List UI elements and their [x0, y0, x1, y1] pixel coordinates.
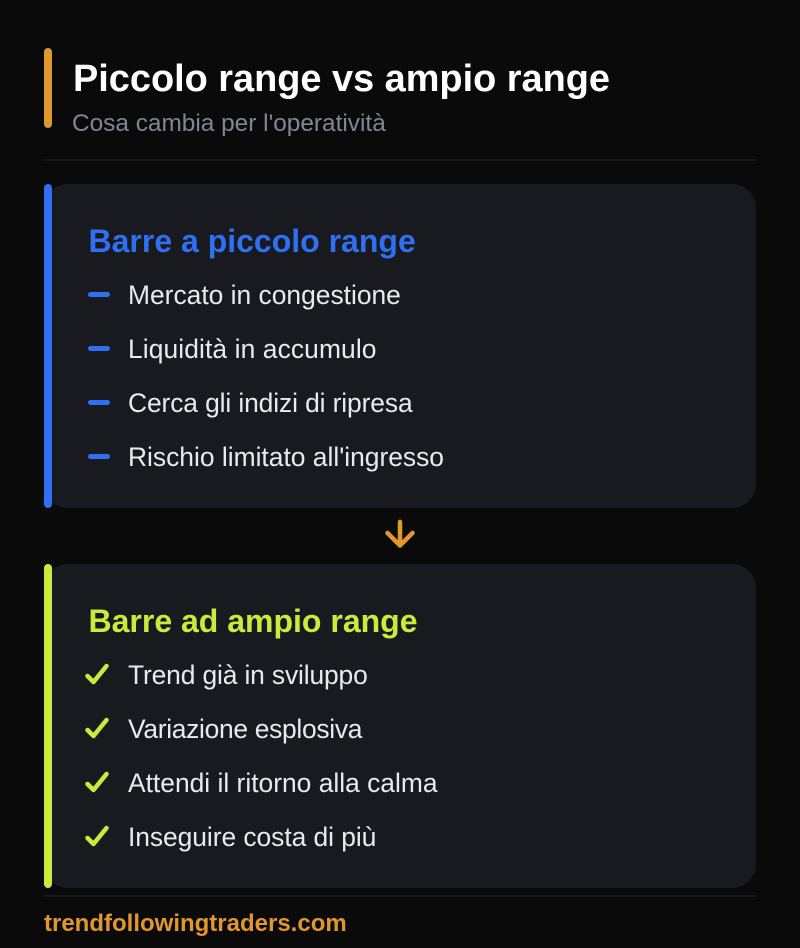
list item: risk: Rischio limitato all'ingresso: [128, 442, 444, 472]
footer: website: trendfollowingtraders.com: [44, 910, 347, 937]
arrow: down: [385, 520, 415, 548]
panel: wide range bars: [44, 564, 756, 888]
list item: chasing: Inseguire costa di più: [128, 822, 376, 852]
panel accent bar: blue: [44, 184, 52, 508]
panel accent bar: lime: [44, 564, 52, 888]
list item: liquidity: Liquidità in accumulo: [128, 334, 377, 364]
panel: small range bars: [44, 184, 756, 508]
title: Piccolo range vs ampio range: [73, 58, 610, 100]
list item: wait: Attendi il ritorno alla calma: [128, 768, 438, 798]
list item: trend: Trend già in sviluppo: [128, 660, 368, 690]
header accent bar: [44, 48, 52, 128]
list item: congestion: Mercato in congestione: [128, 280, 401, 310]
subtitle: Cosa cambia per l'operatività: [72, 110, 386, 137]
list item: recovery: Cerca gli indizi di ripresa: [128, 388, 413, 418]
heading: small range: Barre a piccolo range: [88, 223, 416, 259]
heading: wide range: Barre ad ampio range: [88, 603, 418, 639]
list item: variation: Variazione esplosiva: [128, 714, 362, 744]
